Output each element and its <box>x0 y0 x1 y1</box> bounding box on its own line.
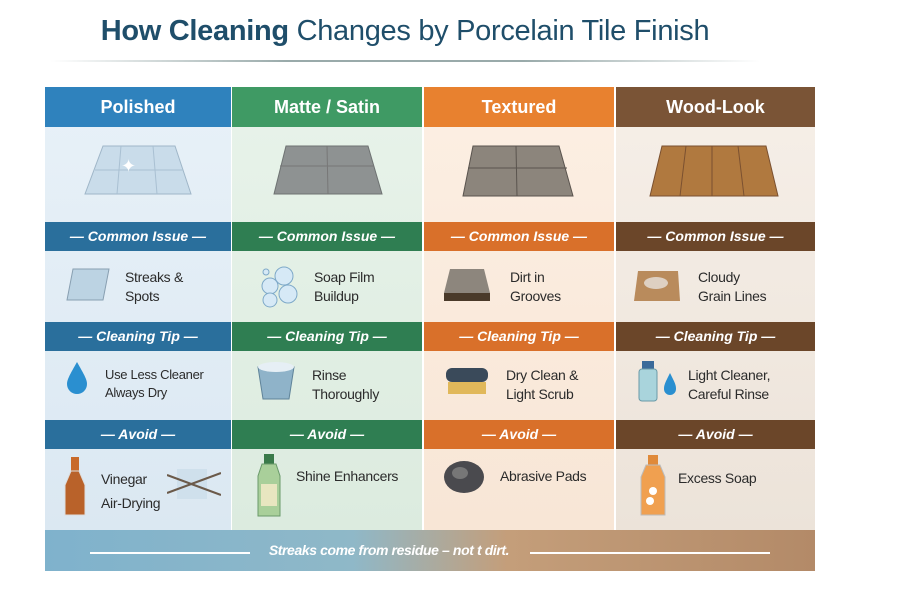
section: common issue <box>616 222 815 251</box>
section: cleaning tip: — Cleaning Tip — <box>656 328 775 344</box>
section: common issue <box>232 222 422 251</box>
panel: textured <box>424 87 614 530</box>
icon: brush <box>446 368 488 394</box>
panel: wood <box>616 87 815 530</box>
icon: bubbles <box>262 266 298 308</box>
text: soap film <box>314 269 374 304</box>
section: avoid <box>232 420 422 449</box>
section: avoid <box>45 420 231 449</box>
text: rinse: Rinse <box>312 367 346 383</box>
text: light cleaner: Light Cleaner, <box>688 367 770 383</box>
icon: shine bottle <box>258 454 280 516</box>
section: common issue: — Common Issue — <box>451 228 587 244</box>
footer callout <box>45 530 815 571</box>
text: dry clean: Dry Clean & <box>506 367 578 383</box>
text: rinse <box>312 367 380 402</box>
section: cleaning tip <box>232 322 422 351</box>
section: cleaning tip <box>424 322 614 351</box>
text: cloudy <box>698 269 766 304</box>
section: common issue: — Common Issue — <box>647 228 784 244</box>
text: cloudy: Grain Lines <box>698 288 766 304</box>
icon: polished tile <box>84 146 192 194</box>
section: common issue: — Common Issue — <box>259 228 395 244</box>
text: dirt <box>510 269 561 304</box>
section: avoid: — Avoid — <box>290 426 364 442</box>
heading: matte: Matte / Satin <box>274 97 380 117</box>
section: avoid <box>616 420 815 449</box>
text: avoid: Vinegar <box>101 471 147 487</box>
icon: vinegar bottle <box>64 457 86 516</box>
section: avoid: — Avoid — <box>101 426 175 442</box>
icon: wood planks <box>649 146 779 196</box>
section: avoid: — Avoid — <box>678 426 753 442</box>
section: cleaning tip <box>616 322 815 351</box>
text: excess soap: Excess Soap <box>678 470 756 486</box>
section: avoid: — Avoid — <box>482 426 556 442</box>
text: avoid: Air-Drying <box>101 495 160 511</box>
text: dirt: Dirt in <box>510 269 544 285</box>
text: tip <box>105 367 204 400</box>
icon: abrasive pad <box>444 461 484 493</box>
section: avoid <box>424 420 614 449</box>
icon: matte tile <box>273 146 383 194</box>
section: cleaning tip <box>45 322 231 351</box>
icon: polished tile: ✦ <box>121 156 136 176</box>
text: shine enhancers: Shine Enhancers <box>296 468 398 484</box>
text: dry clean <box>506 367 578 402</box>
heading: wood <box>616 87 815 127</box>
panel: polished <box>45 87 231 530</box>
heading: textured <box>424 87 614 127</box>
text: tip: Always Dry <box>105 385 167 400</box>
section: cleaning tip: — Cleaning Tip — <box>78 328 198 344</box>
text: avoid <box>101 471 160 511</box>
text: rinse: Thoroughly <box>312 386 379 402</box>
icon: streaks <box>66 268 110 300</box>
section: common issue: — Common Issue — <box>70 228 206 244</box>
heading: matte <box>232 87 422 127</box>
text: soap film: Buildup <box>314 288 359 304</box>
text: dry clean: Light Scrub <box>506 386 574 402</box>
text: streaks <box>125 269 184 304</box>
panel: matte <box>232 87 422 530</box>
icon: crossed cloth <box>167 469 221 499</box>
icon: drop <box>67 362 87 394</box>
section: common issue <box>45 222 231 251</box>
text: streaks: Spots <box>125 288 159 304</box>
text: light cleaner: Careful Rinse <box>688 386 769 402</box>
icon: cloudy plank <box>634 271 680 301</box>
icon: soap bottle <box>640 455 666 516</box>
text: dirt: Grooves <box>510 288 561 304</box>
heading: polished: Polished <box>100 97 176 117</box>
text: soap film: Soap Film <box>314 269 374 285</box>
text: light cleaner <box>688 367 770 402</box>
title: How Cleaning Changes by Porcelain Tile Finish <box>101 15 709 47</box>
heading: wood: Wood-Look <box>666 97 765 117</box>
icon: textured tile <box>462 146 574 196</box>
icon: bucket <box>257 362 295 400</box>
text: cloudy: Cloudy <box>698 269 740 285</box>
footer text: Streaks come from residue – not t dirt. <box>269 542 509 558</box>
text: tip: Use Less Cleaner <box>105 367 204 382</box>
section: cleaning tip: — Cleaning Tip — <box>267 328 387 344</box>
icon: dirt tile <box>444 269 490 301</box>
heading: textured: Textured <box>482 97 556 117</box>
section: cleaning tip: — Cleaning Tip — <box>459 328 579 344</box>
text: abrasive pads: Abrasive Pads <box>500 468 586 484</box>
text: streaks: Streaks & <box>125 269 183 285</box>
section: common issue <box>424 222 614 251</box>
icon: spray bottle <box>638 361 676 402</box>
heading: polished <box>45 87 231 127</box>
